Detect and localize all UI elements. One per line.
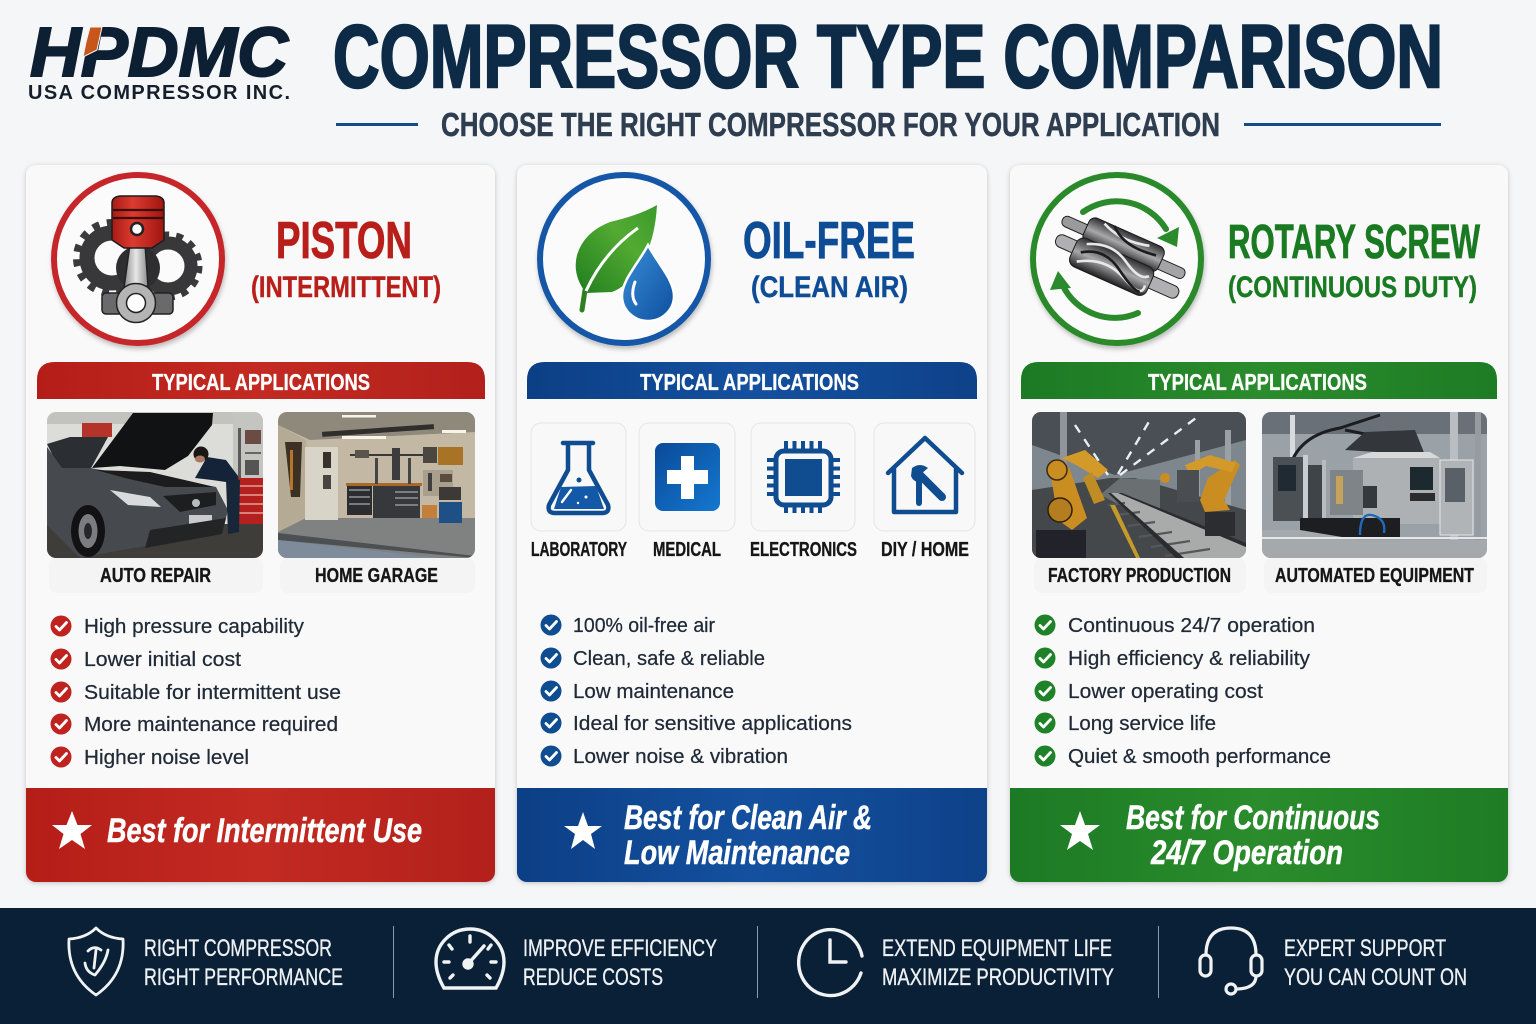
callout: best for continuous operation: 24/7 Operation <box>1150 834 1343 872</box>
benefits list: piston: More maintenance required <box>84 713 338 736</box>
logo: HPDMC USA Compressor Inc.: USA COMPRESSOR INC. <box>28 82 290 104</box>
photo: factory production <box>1032 412 1246 558</box>
benefits list: rotary screw <box>1034 614 1331 768</box>
benefits list: piston <box>50 615 341 769</box>
callout: best for clean air: Best for Clean Air & <box>624 799 872 837</box>
label: laboratory: LABORATORY <box>531 539 627 561</box>
benefits list: piston: Lower initial cost <box>84 648 241 671</box>
benefits list: oil-free <box>540 614 852 768</box>
callout: best for intermittent use <box>26 788 495 882</box>
label: electronics: ELECTRONICS <box>750 539 857 561</box>
callout: best for clean air <box>517 788 987 882</box>
text: improve efficiency: IMPROVE EFFICIENCY <box>523 935 717 962</box>
text: extend equipment life: MAXIMIZE PRODUCTIVITY <box>882 964 1114 991</box>
benefits list: piston: High pressure capability <box>84 615 305 638</box>
benefits list: oil-free: Lower noise & vibration <box>573 745 788 768</box>
callout: best for continuous operation: Best for Continuous <box>1126 799 1380 837</box>
icon: gauge <box>436 929 504 988</box>
section header: typical applications: TYPICAL APPLICATIONS <box>1148 369 1367 395</box>
text: improve efficiency: REDUCE COSTS <box>523 964 663 991</box>
benefits list: rotary screw: High efficiency & reliability <box>1068 647 1311 670</box>
section header: typical applications <box>37 362 485 399</box>
label: home garage <box>280 558 475 593</box>
tile: electronics <box>751 423 855 531</box>
label: factory production: FACTORY PRODUCTION <box>1048 565 1231 587</box>
text: right compressor: RIGHT COMPRESSOR <box>144 935 332 962</box>
label: auto repair <box>49 558 263 593</box>
heading: oil-free: OIL-FREE <box>743 212 915 270</box>
icon: piston and gears <box>54 175 222 343</box>
benefits list: oil-free: Low maintenance <box>573 680 734 703</box>
section header: typical applications <box>527 362 977 399</box>
icon: shield <box>69 928 123 995</box>
benefits list: rotary screw: Quiet & smooth performance <box>1068 745 1331 768</box>
icon: leaf and water drop <box>540 175 708 343</box>
section header: typical applications: TYPICAL APPLICATIONS <box>152 369 370 395</box>
benefits list: rotary screw: Lower operating cost <box>1068 680 1263 703</box>
tile: medical <box>639 423 735 531</box>
callout: best for continuous operation <box>1010 788 1508 882</box>
label: automated equipment <box>1264 558 1487 593</box>
text: right compressor <box>144 935 343 991</box>
benefits list: piston: Higher noise level <box>84 746 249 769</box>
benefits list: piston: Suitable for intermittent use <box>84 681 341 704</box>
subheading: intermittent: (INTERMITTENT) <box>251 271 441 304</box>
label: medical: MEDICAL <box>653 539 721 561</box>
callout: best for intermittent use: Best for Intermittent Use <box>107 812 422 850</box>
icon: rotary screw rotors with arrows <box>1033 175 1201 343</box>
benefits list: oil-free: Ideal for sensitive applications <box>573 712 852 735</box>
callout: best for clean air: Low Maintenance <box>624 834 850 872</box>
footer band <box>0 908 1536 1024</box>
section header: typical applications <box>1021 362 1497 399</box>
photo: auto repair <box>47 412 263 558</box>
subheading: continuous duty: (CONTINUOUS DUTY) <box>1228 271 1477 304</box>
section header: typical applications: TYPICAL APPLICATIONS <box>640 369 859 395</box>
text: expert support: EXPERT SUPPORT <box>1284 935 1446 962</box>
tile: laboratory <box>531 423 626 531</box>
icon: clock <box>799 930 862 996</box>
label: factory production <box>1034 558 1246 593</box>
panel: piston <box>26 165 495 882</box>
benefits list: oil-free: 100% oil-free air <box>573 614 715 637</box>
panel: oil-free <box>517 165 987 882</box>
subheading: clean air: (CLEAN AIR) <box>751 271 908 304</box>
benefits list: rotary screw: Long service life <box>1068 712 1216 735</box>
text: expert support <box>1284 935 1467 991</box>
tile: diy home <box>874 423 975 531</box>
text: extend equipment life: EXTEND EQUIPMENT LIFE <box>882 935 1112 962</box>
photo: home garage <box>278 412 475 558</box>
heading: piston: PISTON <box>276 212 412 270</box>
label: diy home: DIY / HOME <box>881 539 969 561</box>
text: right compressor: RIGHT PERFORMANCE <box>144 964 343 991</box>
text: expert support: YOU CAN COUNT ON <box>1284 964 1467 991</box>
benefits list: oil-free: Clean, safe & reliable <box>573 647 765 670</box>
label: home garage: HOME GARAGE <box>315 565 438 587</box>
benefits list: rotary screw: Continuous 24/7 operation <box>1068 614 1315 637</box>
photo: automated equipment <box>1262 412 1487 558</box>
label: auto repair: AUTO REPAIR <box>100 565 211 587</box>
logo: HPDMC USA Compressor Inc.: HPDMC <box>30 13 289 91</box>
panel: rotary screw <box>1010 165 1508 882</box>
subtitle with rules: CHOOSE THE RIGHT COMPRESSOR FOR YOUR APPLICATION <box>441 106 1220 143</box>
text: extend equipment life <box>882 935 1114 991</box>
label: automated equipment: AUTOMATED EQUIPMENT <box>1275 565 1474 587</box>
text: improve efficiency <box>523 935 717 991</box>
icon: headset <box>1200 928 1262 994</box>
